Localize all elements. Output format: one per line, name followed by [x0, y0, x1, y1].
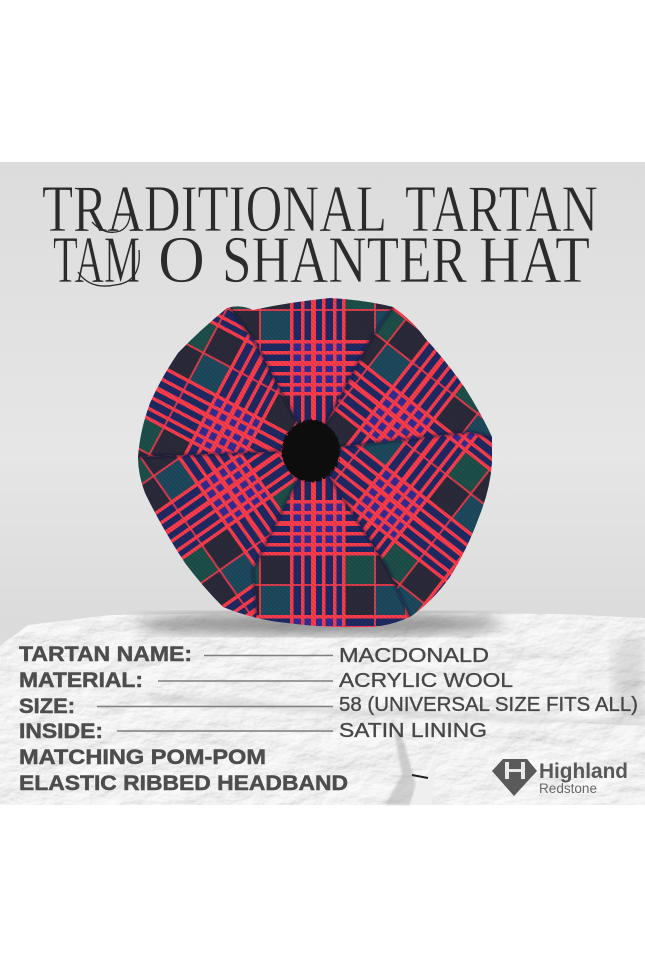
background panel [0, 162, 645, 805]
tartan hat [138, 298, 492, 628]
logo: Highland Redstone: Highland [539, 760, 628, 783]
title: SHANTER [222, 223, 467, 297]
spec values: MACDONALD [339, 644, 489, 667]
spec labels: INSIDE: [19, 720, 103, 743]
spec labels [19, 643, 348, 795]
infographic [0, 162, 645, 806]
stone plinth [0, 612, 645, 805]
spec values: 58 (UNIVERSAL SIZE FITS ALL) [339, 693, 638, 716]
title: TAM [53, 223, 140, 297]
pom-pom [282, 420, 340, 482]
spec values: ACRYLIC WOOL [339, 669, 513, 692]
spec labels: TARTAN NAME: [19, 643, 192, 666]
title [42, 172, 598, 297]
icon: diamond H [492, 759, 537, 796]
spec labels: ELASTIC RIBBED HEADBAND [19, 772, 348, 795]
spec values: SATIN LINING [339, 719, 487, 742]
title: HAT [479, 223, 590, 297]
spec labels: MATERIAL: [19, 669, 143, 692]
logo: Highland Redstone [492, 759, 628, 796]
logo: Highland Redstone: Redstone [539, 781, 597, 796]
leader lines [97, 656, 333, 731]
spec values [339, 644, 638, 742]
hat shadow [135, 613, 505, 635]
title: TRADITIONAL [42, 172, 387, 246]
panel seams [138, 307, 492, 617]
title: O [158, 223, 205, 297]
spec labels: SIZE: [19, 695, 75, 718]
spec labels: MATCHING POM-POM [19, 746, 266, 769]
